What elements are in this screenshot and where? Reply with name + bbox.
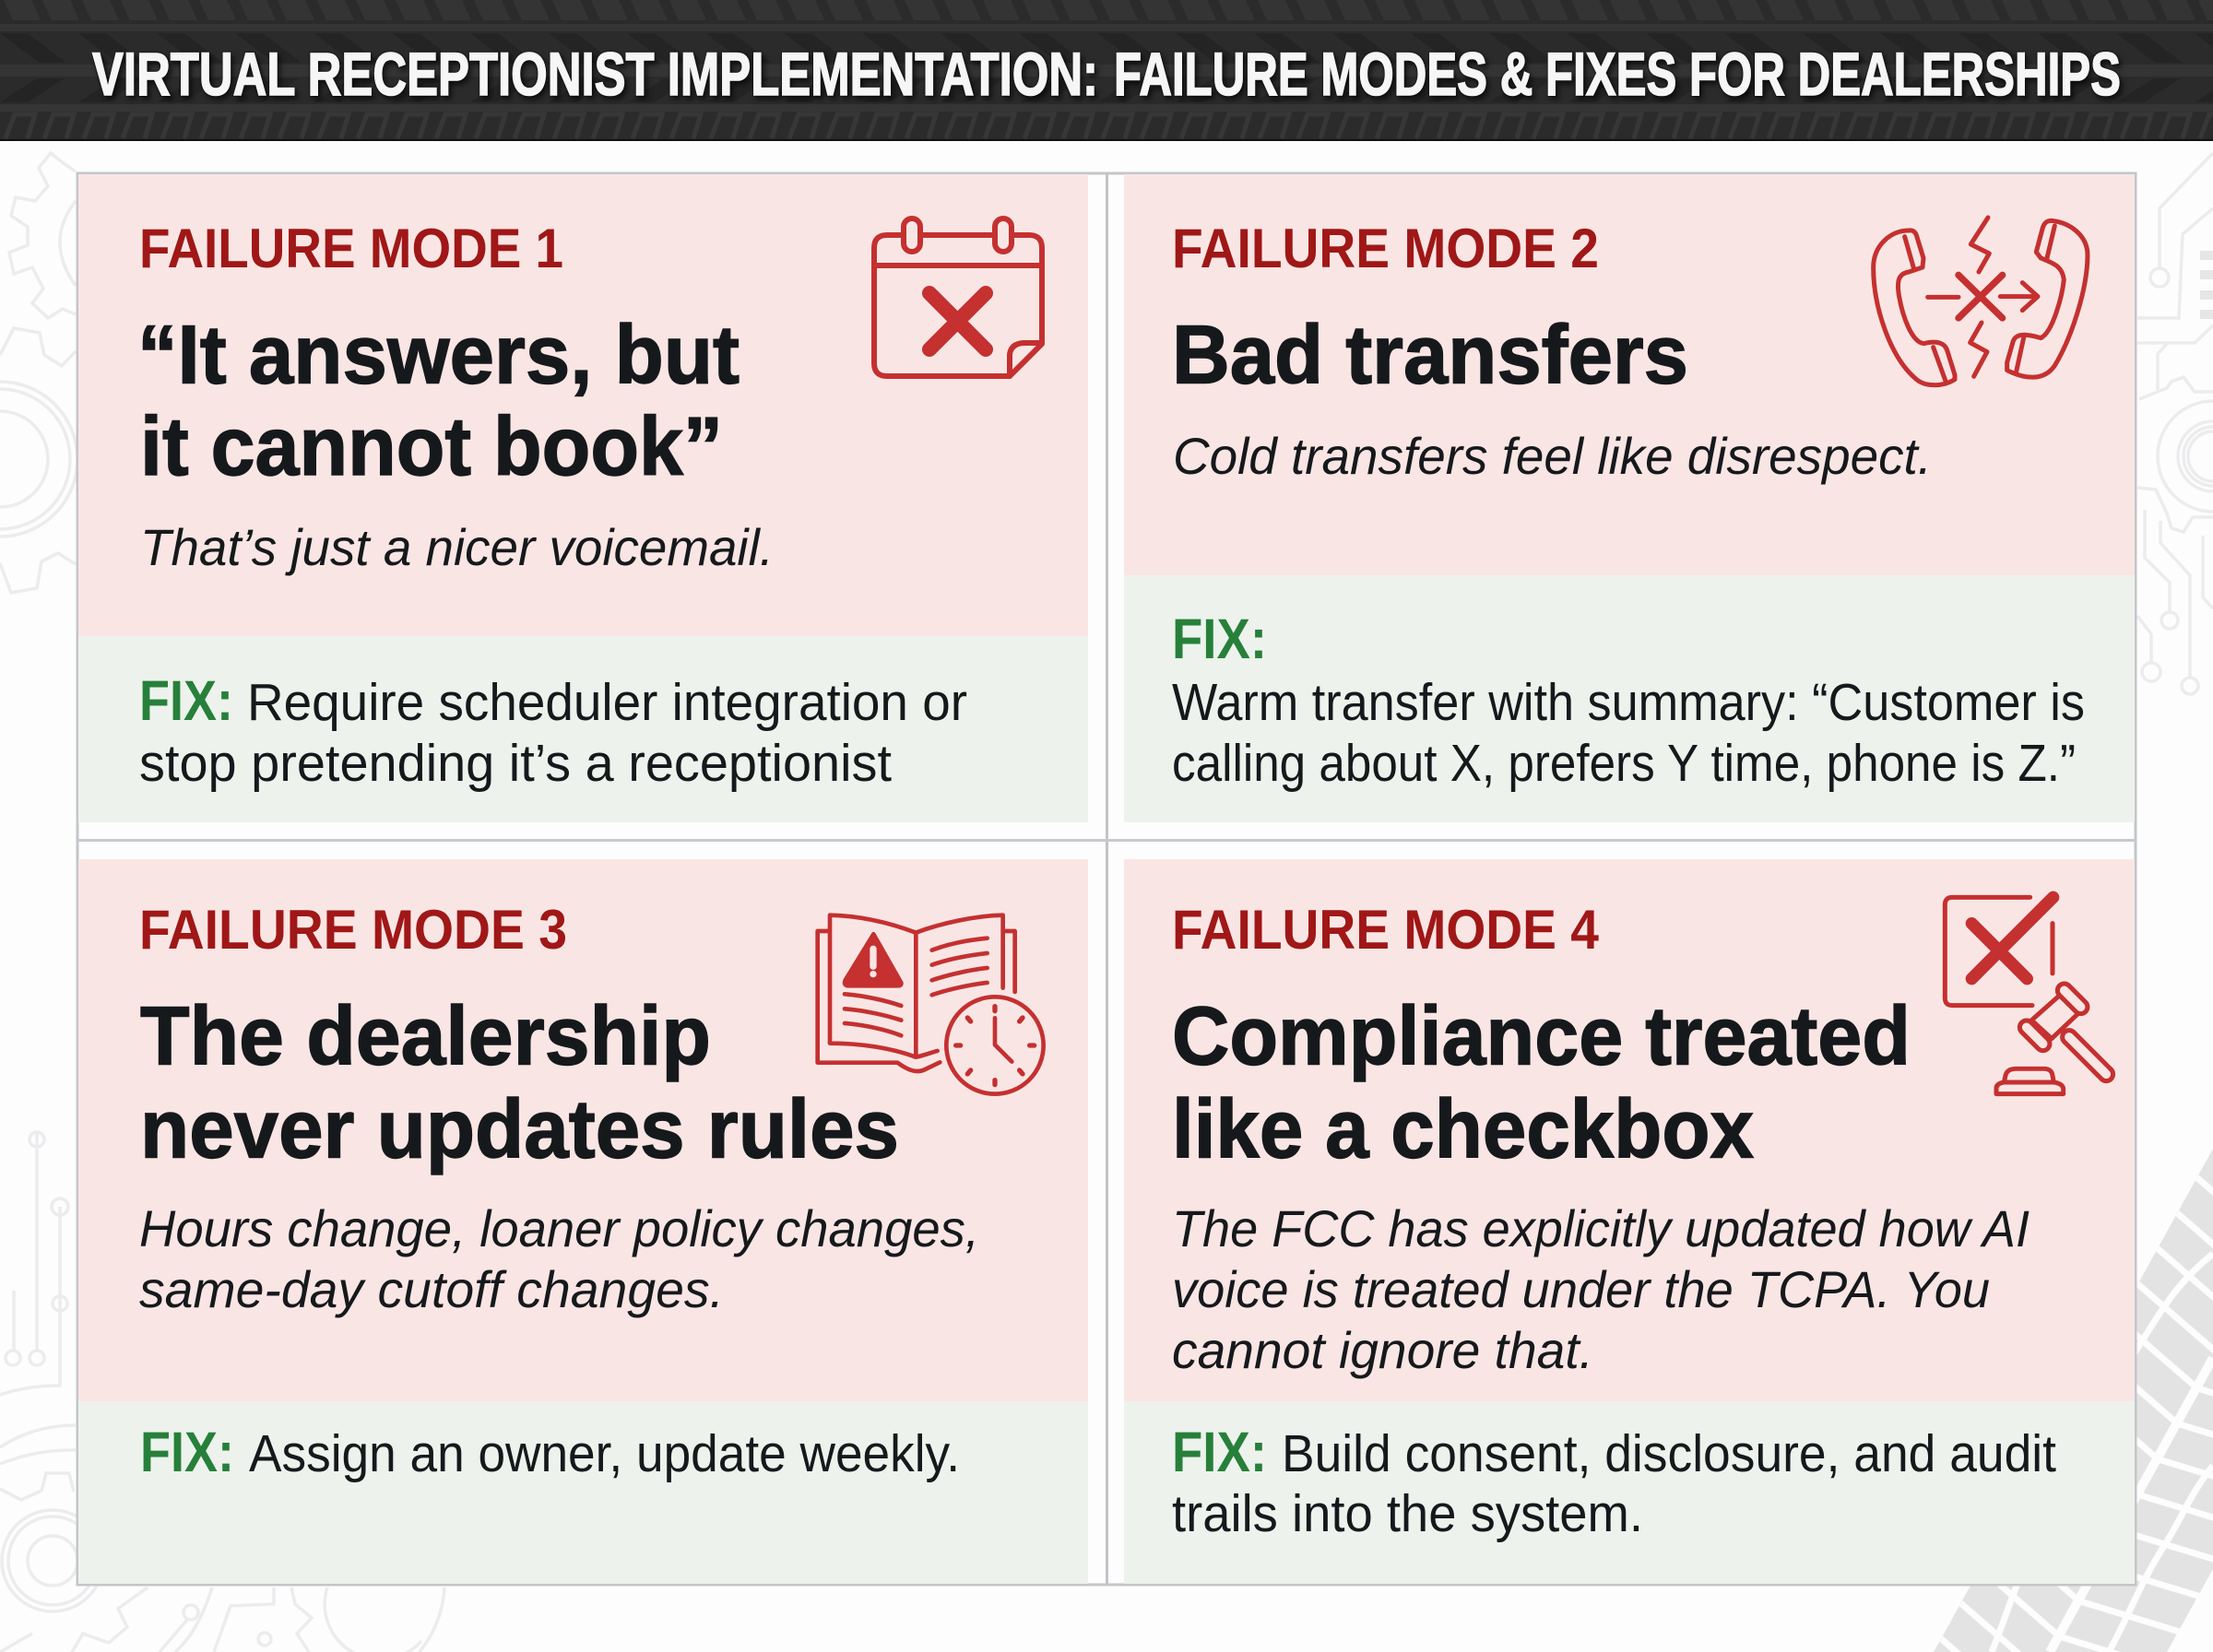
heading: dealership never updates rules: The dealership [140,990,711,1082]
fix text: Build consent, disclosure, and audit [1282,1424,2056,1483]
fix text: FIX: [139,669,233,732]
description: voice is treated under the TCPA. You [1172,1260,1990,1318]
icon: calendar with x [874,218,1042,376]
description: Hours change, loaner policy changes, [139,1199,979,1257]
background: faint gears and circuit traces, left [0,153,444,1652]
label: failure mode 2: FAILURE MODE 2 [1172,218,1599,279]
icon: crossed checkbox and gavel [1945,897,2116,1094]
heading: compliance treated like a checkbox: like a checkbox [1172,1084,1754,1176]
fix text: trails into the system. [1172,1484,1643,1543]
panel: failure mode 4 [1124,859,2135,1584]
heading: bad transfers: Bad transfers [1172,310,1688,402]
fix text: stop pretending it’s a receptionist [139,734,892,793]
heading: it answers but cannot book: it cannot book” [140,401,723,493]
grid frame [77,173,2136,1585]
fix text: FIX: [1172,608,1267,670]
heading: compliance treated like a checkbox: Compliance treated [1172,990,1911,1082]
heading: dealership never updates rules: never updates rules [140,1084,899,1176]
fix text: calling about X, prefers Y time, phone is Z.” [1172,734,2076,793]
heading: it answers but cannot book: “It answers, but [137,310,740,402]
label: failure mode 1: FAILURE MODE 1 [139,218,563,279]
fix text: Require scheduler integration or [247,673,967,732]
heading: dealership never updates rules [140,990,899,1176]
description: Cold transfers feel like disrespect. [1173,427,1932,485]
panel: failure mode 1 [78,174,1088,822]
fix text [139,669,967,793]
description [139,1199,979,1318]
label: failure mode 3: FAILURE MODE 3 [139,899,567,961]
title [92,40,2121,108]
description: The FCC has explicitly updated how AI [1172,1199,2030,1257]
label: failure mode 4: FAILURE MODE 4 [1172,899,1600,961]
icon: broken phone transfer [1874,218,2088,385]
background: tire tread, bottom right [1934,1149,2213,1652]
description: That’s just a nicer voicemail. [140,518,774,576]
background: faint circuit traces and gear, right [2137,153,2213,694]
fix text: Assign an owner, update weekly. [249,1424,960,1483]
icon: rule book with clock [818,915,1044,1094]
description: same-day cutoff changes. [139,1260,724,1318]
panel: failure mode 2 [1124,174,2135,822]
title: VIRTUAL RECEPTIONIST IMPLEMENTATION: [92,40,1098,108]
description: cannot ignore that. [1172,1321,1593,1379]
panel: failure mode 3 [78,859,1088,1584]
fix text: FIX: [140,1421,234,1483]
fix text: FIX: [1172,1421,1267,1483]
fix text: Warm transfer with summary: “Customer is [1172,673,2085,732]
heading: compliance treated like a checkbox [1172,990,1911,1176]
fix text [1172,608,2085,793]
header bar [0,0,2213,141]
fix text [1172,1421,2056,1543]
description [1172,1199,2030,1379]
heading: it answers but cannot book [137,310,740,493]
